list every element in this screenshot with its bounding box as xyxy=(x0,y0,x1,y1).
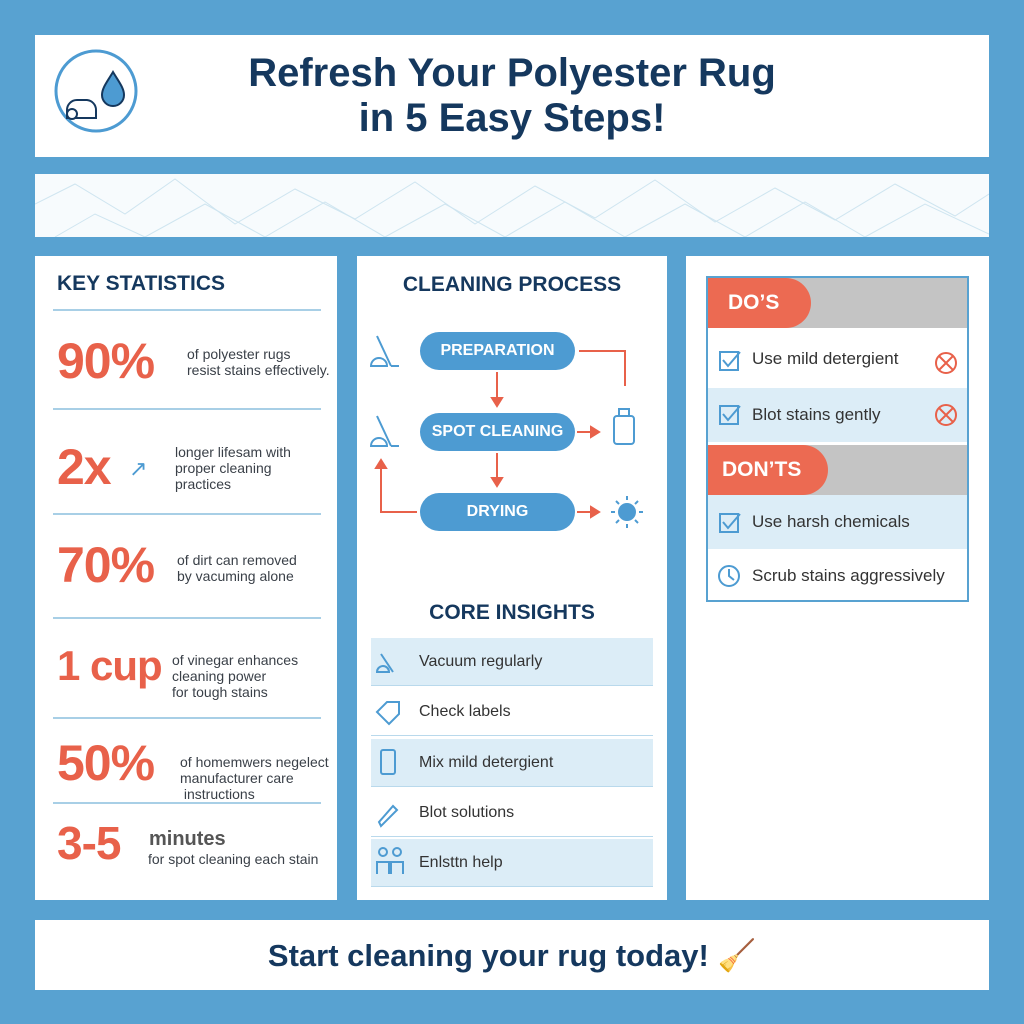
stat: 2x: practices xyxy=(175,476,231,492)
footer call to action: Start cleaning your rug today! 🧹 xyxy=(268,938,756,973)
heading: key statistics: KEY STATISTICS xyxy=(57,272,225,295)
insight rows: Check labels xyxy=(419,703,511,720)
flowchart: SPOT CLEANING xyxy=(432,423,563,440)
title: Refresh Your Polyester Rug xyxy=(248,51,776,95)
stat: 90% xyxy=(57,333,330,389)
stat: 2x: longer lifesam with xyxy=(175,444,291,460)
insight rows xyxy=(371,638,653,887)
stat: 3-5 minutes: minutes xyxy=(149,828,226,850)
panel: do's and don'ts xyxy=(686,256,989,900)
icon: vacuum and drop xyxy=(54,50,138,132)
panel: cleaning process xyxy=(357,256,667,900)
header xyxy=(35,35,989,157)
don't: scrub: Scrub stains aggressively xyxy=(752,566,945,585)
flowchart xyxy=(370,332,643,531)
stat: 3-5 minutes: 3-5 xyxy=(57,817,120,869)
panel: key statistics: instructions xyxy=(184,786,255,802)
stat: 90%: of polyester rugs xyxy=(187,346,290,362)
do: blot: Blot stains gently xyxy=(752,405,881,424)
stat: 2x: 2x xyxy=(57,439,111,495)
title: in 5 Easy Steps! xyxy=(359,96,665,140)
do: mild detergent: Use mild detergient xyxy=(752,349,898,368)
stat: 1 cup: of vinegar enhances xyxy=(172,652,298,668)
header: do's: DO’S xyxy=(728,291,779,314)
stat: 2x xyxy=(57,439,291,495)
stat: 70%: 70% xyxy=(57,537,154,593)
header: do's xyxy=(708,278,971,328)
stat: 70%: of dirt can removed xyxy=(177,552,297,568)
flowchart: DRYING xyxy=(467,503,528,520)
don't: harsh xyxy=(708,495,971,549)
stat: 70%: by vacuming alone xyxy=(177,568,294,584)
do: blot xyxy=(708,388,971,442)
panel: key statistics xyxy=(35,256,337,900)
stat: 3-5 minutes xyxy=(57,817,318,869)
title xyxy=(248,51,776,140)
stat: 3-5 minutes: for spot cleaning each stain xyxy=(148,851,318,867)
stat: 50%: manufacturer care xyxy=(180,770,294,786)
stat: 1 cup: for tough stains xyxy=(172,684,268,700)
heading: cleaning process: CLEANING PROCESS xyxy=(403,273,621,296)
insight rows: Blot solutions xyxy=(419,804,514,821)
header: don'ts xyxy=(708,445,971,495)
stat: 70% xyxy=(57,537,297,593)
insight rows: Enlsttn help xyxy=(419,854,503,871)
stat: 1 cup: 1 cup xyxy=(57,642,162,689)
footer call to action xyxy=(35,920,989,990)
insight rows: Mix mild detergient xyxy=(419,754,553,771)
stat: 1 cup: cleaning power xyxy=(172,668,266,684)
stat: 1 cup xyxy=(57,642,298,700)
stat: 2x: proper cleaning xyxy=(175,460,272,476)
flowchart: PREPARATION xyxy=(440,342,555,359)
stat: 50%: of homemwers negelect xyxy=(180,754,329,770)
insight rows: Vacuum regularly xyxy=(419,653,542,670)
header: don'ts: DON’TS xyxy=(722,458,801,481)
stat: 50%: 50% xyxy=(57,735,154,791)
pattern strip xyxy=(35,174,989,237)
stat: 90%: 90% xyxy=(57,333,154,389)
don't: harsh: Use harsh chemicals xyxy=(752,512,910,531)
heading: core insights: CORE INSIGHTS xyxy=(429,601,595,624)
stat: 2x: ↗ xyxy=(129,456,147,481)
stat: 90%: resist stains effectively. xyxy=(187,362,330,378)
stat: 50% xyxy=(57,735,329,802)
